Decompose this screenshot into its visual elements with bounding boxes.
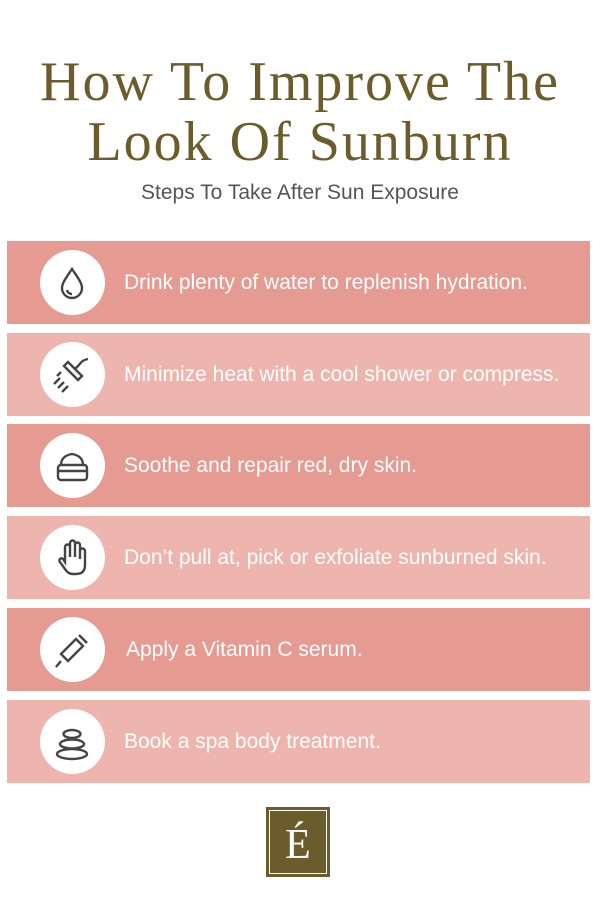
step 4 [7,516,590,599]
step 5: Apply a Vitamin C serum. [126,638,363,661]
icon: water drop [40,250,105,315]
step 4: Don’t pull at, pick or exfoliate sunburned skin. [124,546,547,569]
logo: É [285,822,311,868]
step 6: Book a spa body treatment. [124,730,381,753]
step 3 [7,424,590,507]
step 6 [7,700,590,783]
step 5 [7,608,590,691]
step 2: Minimize heat with a cool shower or compress. [124,363,559,386]
step 2 [7,333,590,416]
logo [266,807,330,877]
step 1: Drink plenty of water to replenish hydration. [124,271,528,294]
title [40,51,560,173]
title: Look Of Sunburn [87,111,513,173]
icon: shower [40,342,105,407]
icon: cream jar [40,433,105,498]
subtitle: Steps To Take After Sun Exposure [141,181,459,204]
icon: spa stones [40,709,105,774]
icon: dropper [40,617,105,682]
icon: hand [40,525,105,590]
step 3: Soothe and repair red, dry skin. [124,454,417,477]
step 1 [7,241,590,324]
title: How To Improve The [40,51,560,113]
